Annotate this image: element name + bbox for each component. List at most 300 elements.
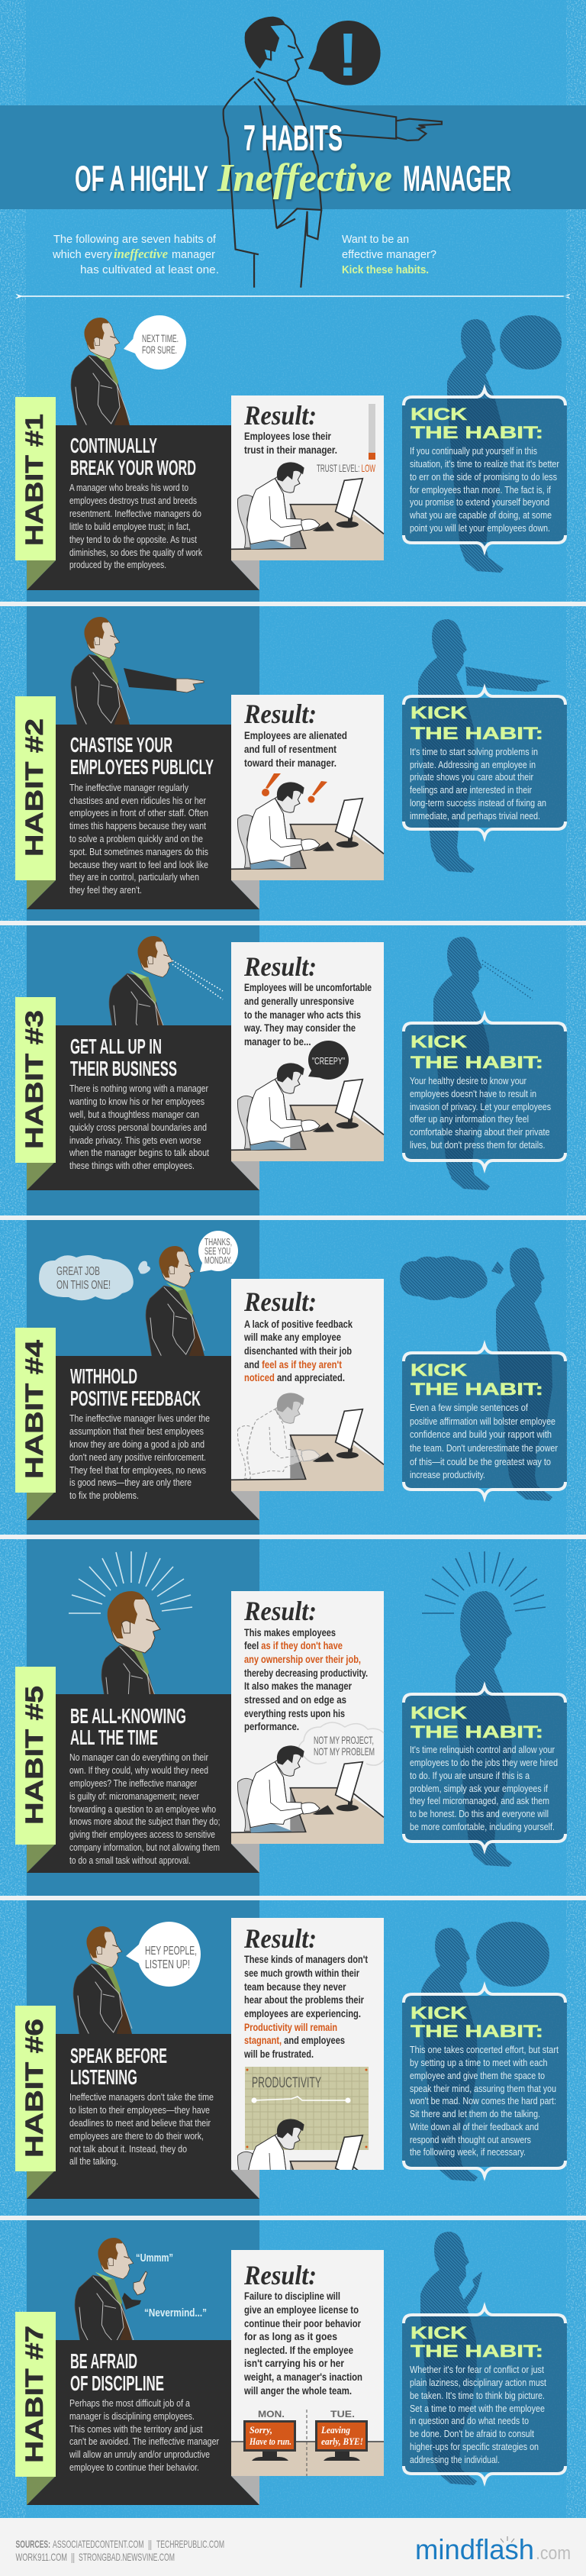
result panel: feel as if they don't have [244, 1640, 343, 1651]
habit description: will allow an unruly and/or unproductive [69, 2449, 210, 2460]
kick the habit box: higher-ups for specific strategies on [410, 2442, 539, 2452]
kick the habit box: the following week, if necessary. [410, 2147, 526, 2158]
kick the habit box [402, 689, 567, 837]
monitor: tuesday [315, 2410, 368, 2461]
result panel: to the manager who acts this [244, 1009, 361, 1021]
kick the habit box: feelings and are interested in their [410, 785, 532, 796]
main title [75, 118, 511, 200]
result panel: Result: [243, 1923, 317, 1954]
kick the habit box: THE HABIT: [411, 2342, 543, 2361]
HABIT 5 [15, 1551, 567, 1873]
kick the habit box: employees to do the jobs they were hired [410, 1758, 558, 1768]
kick the habit box: KICK [411, 703, 467, 722]
sources [15, 2538, 224, 2563]
HABIT 6 [15, 1918, 567, 2217]
speech bubble: thanks [198, 1231, 238, 1272]
quote: ummm: “Ummm” [136, 2252, 173, 2264]
kick the habit box: Sit there and let them do the talking. [410, 2109, 540, 2119]
main title: 7 HABITS [243, 118, 343, 158]
result panel: and full of resentment [244, 744, 336, 755]
kick the habit box: addressing the individual. [410, 2455, 500, 2465]
employee at desk, cropped [237, 2119, 363, 2170]
habit description [69, 783, 208, 896]
result panel: Productivity will remain [244, 2022, 337, 2033]
kick the habit box: If you continually put yourself in this [410, 446, 537, 457]
result panel: toward their manager. [244, 757, 336, 769]
kick the habit box: invasion of privacy. Let your employees [410, 1102, 551, 1112]
kick the habit box: be done. Don't be afraid to consult [410, 2429, 534, 2439]
habit heading [70, 1704, 186, 1749]
result panel: neglected. If the employee [244, 2345, 353, 2356]
habit description: Ineffective managers don't take the time [69, 2092, 214, 2103]
result panel: see much growth within their [244, 1968, 360, 1979]
kick the habit box: lives, but don't press them for details. [410, 1140, 545, 1151]
result panel: stressed and on edge as [244, 1694, 346, 1706]
habit heading: GET ALL UP IN [70, 1035, 162, 1058]
habit heading: THEIR BUSINESS [70, 1057, 177, 1080]
logo: mindflash.com: .com [536, 2543, 571, 2564]
kick the habit box: KICK [411, 1703, 467, 1722]
thought cloud outline: not my project: NOT MY PROJECT, [314, 1734, 374, 1746]
habit description: employees? The ineffective manager [69, 1778, 197, 1789]
kick the habit box: positive affirmation will bolster employee [410, 1416, 555, 1427]
kick the habit box [402, 1687, 567, 1849]
shadow silhouette with raised finger [420, 2232, 482, 2485]
speech bubble: hey people: HEY PEOPLE, [145, 1945, 197, 1958]
result panel: Result: [243, 2260, 317, 2290]
habit description: produced by the employees. [69, 560, 166, 570]
HABIT 7 [15, 2232, 567, 2505]
kick the habit box: you promise to extend yourself beyond [410, 497, 549, 508]
intro text left: which every [52, 249, 113, 261]
kick the habit box: for employees than more. The fact is, if [410, 485, 551, 496]
productivity chart [245, 2067, 369, 2150]
manager figure pointing [71, 617, 204, 732]
kick the habit box: to err on the side of promising to do less [410, 472, 557, 483]
habit description: well, but a thoughtless manager can [69, 1109, 199, 1120]
shadow silhouette with big head and rays [422, 1551, 546, 1867]
result panel: performance. [244, 1721, 299, 1732]
thought cloud: great job [39, 1255, 150, 1300]
habit heading [70, 1035, 177, 1080]
fold triangles and dark title panel [27, 725, 259, 909]
trust gauge: TRUST LEVEL: LOW [317, 462, 375, 474]
orange exclamation marks [262, 773, 327, 803]
habit description: is good news—they are only there [69, 1477, 192, 1488]
result panel: isn't carrying his or her [244, 2358, 345, 2369]
habit heading: CHASTISE YOUR [70, 733, 172, 757]
habit description: not talk about it. Instead, they do [69, 2144, 187, 2155]
habit heading: POSITIVE FEEDBACK [70, 1386, 201, 1410]
kick the habit box: won't be mad. Now comes the hard part: [409, 2096, 556, 2106]
habit tab [15, 2312, 56, 2477]
header: line-art manager figure with speech bubble [224, 18, 442, 288]
habit tab [15, 397, 56, 560]
intro text left: ineffective [114, 247, 168, 261]
kick the habit box: It's time to start solving problems in [410, 747, 538, 757]
habit description: times this happens because they want [69, 821, 206, 831]
speech bubble: creepy [308, 1041, 349, 1080]
kick the habit box: to be honest. Do this and everyone will [410, 1809, 549, 1819]
result panel: give an employee license to [244, 2304, 359, 2316]
monitor: monday: MON. [258, 2410, 285, 2419]
sources: || [148, 2538, 152, 2550]
footer [0, 2518, 586, 2576]
kick the habit box: private shows you care about their [410, 772, 533, 783]
habit description: No manager can do everything on their [69, 1752, 208, 1763]
habit description: The ineffective manager regularly [69, 783, 189, 793]
habit tab: HABIT #1 [21, 414, 48, 546]
speech bubble: next time: NEXT TIME. [142, 332, 179, 344]
fold triangles and dark title panel [27, 2340, 259, 2505]
result panel [231, 2250, 384, 2476]
shadow silhouette with speech bubble [421, 1922, 549, 2181]
kick the habit box: they feel micromanaged, and ask them [410, 1796, 549, 1806]
habit description: to solve a problem quickly and on the [69, 834, 203, 844]
habit description: Perhaps the most difficult job of a [69, 2398, 190, 2409]
habit description: assumption that their best employees [69, 1426, 204, 1437]
kick the habit box: THE HABIT: [411, 724, 543, 743]
speech bubble: next time: FOR SURE. [142, 344, 177, 356]
kick the habit box [402, 1987, 567, 2176]
kick the habit box: This one takes concerted effort, but start [410, 2045, 559, 2055]
result panel: stagnant, and employees [244, 2035, 345, 2046]
habit description: They feel that for employees, no news [69, 1465, 206, 1476]
habit tab: HABIT #6 [21, 2019, 48, 2158]
speech bubble: next time [124, 315, 186, 370]
result panel: Employees lose their [244, 431, 332, 442]
habit description: deadlines to meet and believe that their [69, 2118, 211, 2129]
habit description: knows more about the subject than they do; [69, 1816, 220, 1827]
kick the habit box: confidence and build your rapport with [410, 1429, 552, 1440]
manager figure with dotted gaze [109, 936, 223, 1051]
intro text right: Want to be an [342, 234, 409, 246]
thought cloud outline: not my project [299, 1722, 384, 1765]
result panel: These kinds of managers don't [244, 1954, 368, 1965]
speech bubble: thanks: MONDAY. [204, 1254, 232, 1266]
kick the habit box: THE HABIT: [411, 1380, 543, 1399]
habit tab: HABIT #5 [21, 1686, 48, 1825]
monitor: tuesday: Leaving [320, 2424, 350, 2436]
habit description [69, 2398, 219, 2473]
kick the habit box: offer up any information they feel [410, 1114, 529, 1125]
logo: mindflash.com: mindflash [415, 2534, 534, 2565]
manager figure [146, 1246, 206, 1364]
kick the habit box [402, 2307, 567, 2481]
habit tab [15, 2006, 56, 2171]
habit heading: OF DISCIPLINE [70, 2371, 164, 2395]
monitor: tuesday: TUE. [330, 2410, 355, 2419]
title band [0, 105, 586, 209]
kick the habit box: problem, simply ask your employees if [410, 1784, 548, 1794]
kick the habit box: immediate, and perhaps trivial need. [410, 811, 540, 822]
result panel: employees are experiencing. [244, 2008, 361, 2019]
monitor: monday: Have to run. [249, 2436, 291, 2447]
habit heading [70, 434, 196, 479]
habit description: to do a small task without approval. [69, 1855, 191, 1866]
habit heading [70, 1364, 201, 1410]
habit description: manager is disciplining employees. [69, 2411, 195, 2422]
habit tab [15, 1328, 56, 1493]
kick the habit box: what you are capable of doing, at some [409, 510, 552, 521]
kick the habit box: be more comfortable, including yourself. [410, 1822, 555, 1832]
result panel: thereby decreasing productivity. [244, 1667, 368, 1679]
manager figure [73, 1926, 134, 2042]
manager figure [71, 318, 131, 433]
result panel: Result: [243, 951, 317, 982]
kick the habit box: point you will let your employees down. [410, 523, 550, 534]
habit description: employee to continue their behavior. [69, 2462, 199, 2473]
thought cloud: great job: GREAT JOB [56, 1265, 100, 1278]
habit tab: HABIT #3 [21, 1010, 48, 1149]
speech bubble: hey people: LISTEN UP! [145, 1958, 190, 1971]
result panel: continue their poor behavior [244, 2318, 362, 2329]
kick the habit box: Set a time to meet with the employee [410, 2403, 545, 2414]
shadow silhouette with speech bubble [447, 315, 562, 573]
employee at desk [231, 1745, 384, 1844]
habit description: A manager who breaks his word to [69, 483, 188, 493]
result panel: will anger the whole team. [243, 2385, 352, 2397]
sources: || [71, 2551, 75, 2563]
habit description: these things with other employees. [69, 1160, 195, 1171]
result panel: weight, a manager's inaction [243, 2371, 362, 2383]
speech bubble: thanks: SEE YOU [204, 1245, 230, 1257]
intro text right [342, 234, 436, 276]
habit heading: BE ALL-KNOWING [70, 1704, 186, 1728]
result panel [231, 395, 384, 560]
kick the habit box [402, 1345, 567, 1497]
habit heading [70, 733, 214, 779]
habit heading: WITHHOLD [70, 1364, 137, 1388]
main title: Ineffective [217, 157, 392, 200]
habit heading [70, 2349, 164, 2395]
fold triangles and dark title panel [27, 1694, 259, 1873]
habit tab: HABIT #4 [21, 1340, 48, 1479]
result panel [231, 695, 384, 880]
habit description [69, 1083, 209, 1171]
habit description [69, 1413, 210, 1501]
dark column behind habit panels [27, 590, 259, 2505]
result panel: Employees will be uncomfortable [244, 982, 372, 993]
habit description: can't be avoided. The ineffective manager [69, 2436, 219, 2447]
habit description: know they are doing a good a job and [69, 1439, 204, 1450]
thought cloud: great job: ON THIS ONE! [56, 1279, 111, 1292]
result panel: Result: [243, 1286, 317, 1317]
kick the habit box: situation, it's time to realize that it's better [410, 459, 559, 470]
habit description: There is nothing wrong with a manager [69, 1083, 208, 1094]
kick the habit box: employees doesn't have to result in [410, 1089, 536, 1099]
result panel: Result: [243, 400, 317, 431]
habit heading: SPEAK BEFORE [70, 2044, 167, 2068]
habit description [69, 1752, 220, 1866]
result panel: It also makes the manager [244, 1680, 353, 1692]
habit tab: HABIT #7 [21, 2326, 48, 2463]
fold triangles and dark title panel [27, 1025, 259, 1190]
kick the habit box: KICK [411, 405, 467, 424]
kick the habit box: KICK [411, 2003, 467, 2022]
kick the habit box: speak their mind, assuring them that you [410, 2084, 556, 2094]
result panel: for as long as it goes [244, 2331, 337, 2342]
employee at desk [231, 782, 384, 880]
kick the habit box: THE HABIT: [411, 2022, 543, 2041]
habit description: company information, but not allowing them [69, 1842, 220, 1853]
header: line-art manager figure with speech bubble: ! [338, 21, 358, 89]
speech bubble: thanks: THANKS, [204, 1236, 232, 1248]
divider lines between habits [0, 602, 586, 2220]
kick the habit box: in question and do what needs to [410, 2416, 529, 2426]
result panel [231, 1591, 384, 1844]
result panel: manager to be... [244, 1036, 311, 1048]
habit description: to fix the problems. [69, 1490, 139, 1501]
habit description: spot. But sometimes managers do this [69, 847, 208, 857]
habit description: they tend to do the opposite. As trust [69, 534, 197, 545]
result panel: Employees are alienated [244, 730, 347, 741]
kick the habit box: long-term success instead of fixing an [410, 798, 546, 809]
habit description [69, 2092, 214, 2167]
speech bubble: creepy: "CREEPY" [312, 1055, 345, 1067]
habit tab [15, 696, 56, 880]
habit description: This comes with the territory and just [69, 2424, 203, 2435]
habit heading: EMPLOYEES PUBLICLY [70, 755, 214, 779]
habit heading [70, 2044, 167, 2089]
habit description: when the manager begins to talk about [69, 1148, 209, 1158]
result panel: Result: [243, 1596, 317, 1626]
intro text left: has cultivated at least one. [80, 264, 219, 276]
result panel: everything rests upon his [244, 1708, 345, 1719]
result panel: Result: [243, 699, 317, 729]
habit description: resentment. Ineffective managers do [69, 508, 201, 519]
productivity chart: PRODUCTIVITY [252, 2075, 321, 2091]
habit description: little to build employee trust; in fact, [69, 521, 191, 532]
result panel [231, 1279, 384, 1491]
intro text left [52, 234, 219, 276]
habit description: all the talking. [69, 2156, 118, 2167]
kick the habit box: of this—it could be the greatest way to [410, 1457, 551, 1467]
intro text left: manager [172, 249, 215, 261]
intro text left: The following are seven habits of [53, 234, 217, 246]
kick the habit box: KICK [411, 1032, 467, 1051]
kick the habit box: Write down all of their feedback and [410, 2122, 539, 2132]
result panel: This makes employees [244, 1627, 336, 1638]
kick the habit box: KICK [411, 2323, 467, 2342]
habit description: forwarding a question to an employee who [69, 1804, 216, 1815]
habit tab [15, 1667, 56, 1845]
kick the habit box: plain laziness, disciplinary action must [410, 2377, 546, 2388]
result panel: disenchanted with their job [244, 1345, 352, 1357]
sources: STRONGBAD.NEWSVINE.COM [79, 2551, 175, 2563]
speech bubble: hey people [126, 1922, 201, 1987]
employee at desk [231, 462, 384, 560]
kick the habit box: Your healthy desire to know your [410, 1076, 526, 1086]
habit description: to listen to their employees—they have [69, 2105, 210, 2116]
habit description: employees are there to do their work, [69, 2131, 204, 2142]
result panel [231, 942, 384, 1161]
habit description: employees destroys trust and breeds [69, 496, 197, 506]
quote: nevermind: “Nevermind...” [144, 2306, 207, 2319]
HABIT 4 [15, 1231, 567, 1520]
habit description: is guilty of: micromanagement; never [69, 1791, 199, 1802]
habit heading: LISTENING [70, 2065, 137, 2089]
result panel: will be frustrated. [243, 2048, 314, 2060]
habit description: employees in front of other staff. Often [69, 808, 208, 818]
shadow silhouette with thought cloud [400, 1248, 552, 1501]
result panel: way. They may consider the [243, 1022, 356, 1034]
kick the habit box: THE HABIT: [411, 423, 543, 442]
shadow silhouette pointing [418, 619, 551, 873]
habit description: invade privacy. This gets even worse [69, 1135, 201, 1146]
habit description: giving their employees access to sensitive [69, 1829, 215, 1840]
habit heading: BREAK YOUR WORD [70, 456, 196, 479]
kick the habit box [402, 1015, 567, 1168]
kick the habit box: It's time relinquish control and allow your [410, 1745, 555, 1755]
sources: TECHREPUBLIC.COM [156, 2538, 224, 2550]
fold triangles and dark title panel [27, 425, 259, 590]
result panel: any ownership over their job, [244, 1654, 361, 1665]
kick the habit box: be taken. It's time to think big picture. [410, 2390, 545, 2401]
desk with fading dashed employee [231, 1393, 384, 1491]
kick the habit box: THE HABIT: [411, 1722, 543, 1742]
kick the habit box: KICK [411, 1361, 467, 1380]
monitor: monday: Sorry, [250, 2424, 272, 2436]
kick the habit box: respond with thought out answers [410, 2135, 531, 2145]
header divider arrow [15, 293, 571, 299]
result panel: A lack of positive feedback [244, 1319, 353, 1330]
result panel: Failure to discipline will [244, 2290, 340, 2302]
habit tab: HABIT #2 [21, 718, 48, 857]
result panel: team because they never [244, 1981, 346, 1993]
main title: OF A HIGHLY [75, 158, 208, 199]
result panel: hear about the problems their [244, 1994, 365, 2006]
habit description [69, 483, 203, 570]
kick the habit box: comfortable sharing about their private [410, 1127, 550, 1138]
thought cloud outline: not my project: NOT MY PROBLEM [314, 1745, 375, 1758]
habit description: wanting to know his or her employees [69, 1096, 204, 1107]
intro text right: Kick these habits. [342, 264, 429, 276]
kick the habit box [402, 389, 567, 550]
HABIT 3 [15, 936, 567, 1190]
employee at desk [231, 1063, 384, 1161]
result panel: will make any employee [243, 1332, 341, 1343]
kick the habit box: by setting up a time to meet with each [410, 2058, 548, 2068]
habit description: they feel they aren't. [69, 885, 142, 896]
kick the habit box: THE HABIT: [411, 1053, 543, 1072]
manager figure with raised finger [75, 2238, 147, 2353]
habit heading: BE AFRAID [70, 2349, 137, 2373]
result panel [231, 1918, 384, 2170]
intro text right: effective manager? [342, 249, 436, 261]
HABIT 2 [15, 617, 567, 909]
desk and day divider [231, 2410, 384, 2476]
shadow silhouette with dotted gaze [433, 937, 533, 1190]
habit description: quickly cross personal boundaries and [69, 1122, 207, 1133]
result panel: trust in their manager. [244, 444, 337, 456]
HABIT 1 [15, 315, 567, 590]
sources: SOURCES: [15, 2538, 50, 2550]
kick the habit box: employee and give them the space to [410, 2071, 545, 2081]
habit tab [15, 997, 56, 1163]
kick the habit box: the team. Don't underestimate the power [410, 1443, 558, 1454]
habit description: diminishes, so does the quality of work [69, 547, 203, 558]
result panel: and generally unresponsive [244, 996, 354, 1007]
habit description: own. If they could, why would they need [69, 1765, 208, 1776]
sources: ASSOCIATEDCONTENT.COM [53, 2538, 143, 2550]
trust gauge [317, 404, 375, 474]
habit heading: CONTINUALLY [70, 434, 157, 457]
kick the habit box: to do. If you are unsure if this is a [410, 1771, 530, 1781]
result panel: noticed and appreciated. [244, 1372, 345, 1383]
sources: WORK911.COM [15, 2551, 67, 2563]
habit description: because they want to feel and look like [69, 860, 208, 870]
